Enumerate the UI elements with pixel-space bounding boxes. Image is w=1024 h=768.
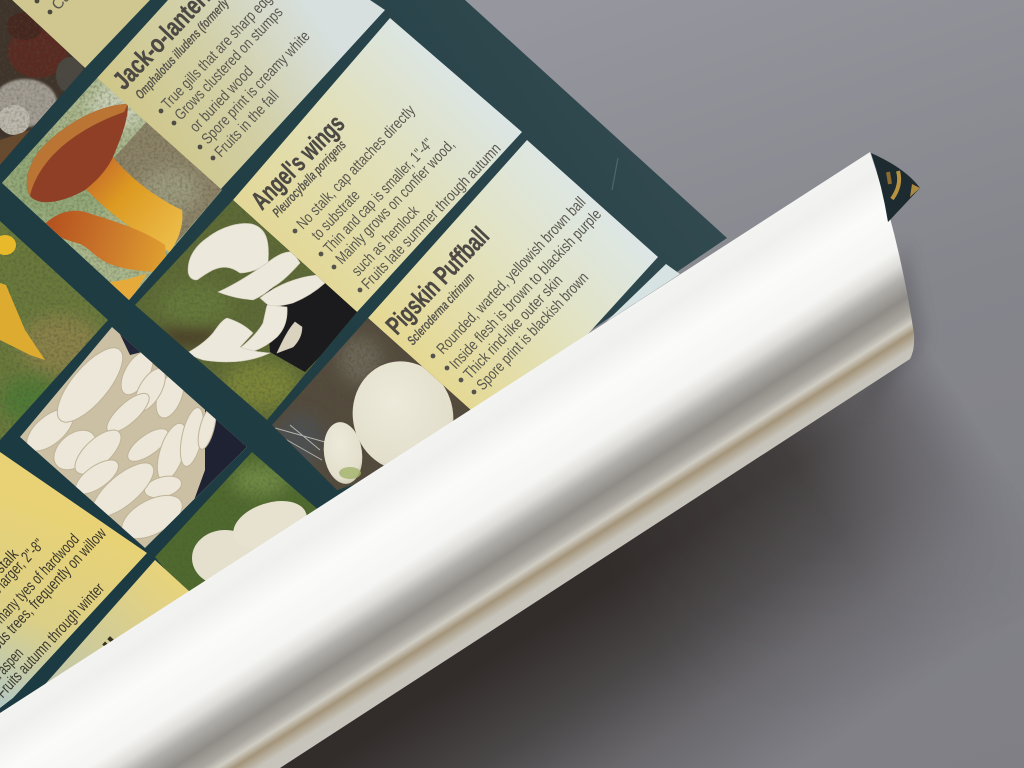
cap and stem xyxy=(27,104,182,252)
panel: top-left card xyxy=(12,0,150,68)
panel: Pigskin Puffball card xyxy=(368,140,658,434)
scientific name: Scleroderma citrinum xyxy=(404,270,477,348)
photo: jack-o-lantern mushrooms xyxy=(2,78,222,300)
bullet list: Jack-o-lantern: Fruits in the fall xyxy=(212,87,282,161)
bullet list: Angel's wings xyxy=(293,102,504,293)
bullet list: Angel's wings: Thin and cap is smaller, 1"-4" xyxy=(321,136,437,257)
bullet list: Angel's wings: Fruits late summer through autumn xyxy=(359,140,504,293)
overlapping caps xyxy=(26,348,216,539)
bullet list: Pigskin Puffball: Rounded, warted, yellowish brown ball xyxy=(434,194,589,358)
soft shadow right of the curl xyxy=(860,240,925,420)
bullet list: Jack-o-lantern: or buried wood xyxy=(187,63,257,136)
bullet list: Pigskin Puffball: Spore print is blackish brown xyxy=(474,269,592,394)
panel: bottom card xyxy=(30,560,190,722)
heading: Pigskin Puffball: Pigskin Puffball xyxy=(380,221,495,340)
bullet list: Angel's wings: such as hemlock xyxy=(349,203,423,280)
poster sheet xyxy=(0,0,727,713)
cast shadow under the curl xyxy=(280,354,990,768)
panel: Angel's wings card xyxy=(233,18,522,312)
curled paper back xyxy=(0,152,914,768)
panel: lower-left card xyxy=(0,452,147,708)
large puffball xyxy=(352,361,454,466)
bullet list: Angel's wings: No stalk, cap attaches directly xyxy=(294,102,419,233)
photo: morel xyxy=(0,0,90,170)
bullet list: Angel's wings: to substrate xyxy=(309,187,364,244)
curl tip showing poster print xyxy=(871,153,920,222)
photo: pigskin puffballs xyxy=(272,318,470,490)
photo: yellow chanterelle in grass xyxy=(0,221,108,440)
white caps xyxy=(187,224,325,362)
photo: angel's wings mushrooms xyxy=(130,195,360,425)
lower cap xyxy=(45,211,168,272)
photo: lower puffball on moss xyxy=(155,452,317,591)
panel: Jack-o-lantern card xyxy=(97,0,385,190)
next card edge xyxy=(606,264,680,322)
bullet list: Pigskin Puffball: Inside flesh is brown to blackish purple xyxy=(447,206,605,373)
bullet list: Angel's wings: Mainly grows on confier wood, xyxy=(333,136,458,268)
bullet list: Jack-o-lantern: Spore print is creamy white xyxy=(199,28,313,148)
small puffball xyxy=(324,422,362,484)
scientific name: Pleurocybella porrigens xyxy=(269,137,349,220)
photo: oyster mushroom cluster xyxy=(20,327,247,548)
heading: Angel's wings: Angel's wings xyxy=(245,109,350,215)
bullet list: Pigskin Puffball xyxy=(431,194,605,394)
panel: bottom card: Puffball xyxy=(42,632,129,722)
bullet list: Pigskin Puffball: Thick rind-like outer skin xyxy=(461,272,566,383)
